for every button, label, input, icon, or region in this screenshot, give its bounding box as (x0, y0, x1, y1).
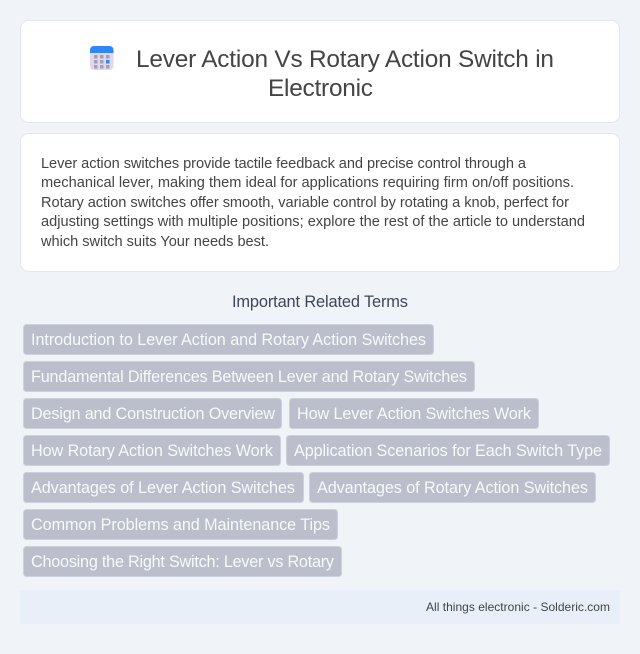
tag: advantages of rotary: Advantages of Rotary Action Switches (317, 479, 588, 497)
tag: application scenarios (286, 436, 610, 466)
tag: how lever switches work (290, 398, 538, 428)
tag: fundamental differences (24, 362, 474, 392)
tag: choosing the right switch: Choosing the Right Switch: Lever vs Rotary (31, 553, 335, 571)
tag: how lever switches work: How Lever Action Switches Work (297, 405, 532, 423)
heading: important related terms: Important Related Terms (232, 293, 408, 311)
summary line 4: adjusting settings with multiple positions; explore the rest of the article to understand (41, 214, 585, 230)
icon: calendar (90, 46, 114, 70)
footer bar (20, 590, 620, 624)
tag: how rotary switches work: How Rotary Action Switches Work (31, 442, 274, 460)
tag: fundamental differences: Fundamental Differences Between Lever and Rotary Switches (31, 368, 467, 386)
tag: choosing the right switch (24, 546, 342, 576)
tag: design and construction: Design and Construction Overview (31, 405, 275, 423)
summary line 5: which switch suits Your needs best. (40, 234, 269, 250)
summary line 1: Lever action switches provide tactile feedback and precise control through a (41, 156, 527, 172)
summary line 2: mechanical lever, making them ideal for applications requiring firm on/off positions. (41, 175, 574, 191)
title line 2: Electronic (268, 75, 373, 102)
tag: advantages of lever: Advantages of Lever Action Switches (31, 479, 295, 497)
tag: application scenarios: Application Scenarios for Each Switch Type (294, 442, 602, 460)
tag: advantages of rotary (310, 472, 596, 502)
title line 1: Lever Action Vs Rotary Action Switch in (136, 46, 554, 73)
panel: title card (20, 20, 620, 122)
tag: common problems (24, 510, 338, 540)
tag: introduction: Introduction to Lever Action and Rotary Action Switches (31, 331, 426, 349)
tag: introduction (24, 324, 434, 354)
summary line 3: Rotary action switches offer smooth, variable control by rotating a knob, perfect for (41, 195, 569, 211)
tag: how rotary switches work (24, 436, 280, 466)
footer text: All things electronic - Solderic.com (426, 600, 610, 614)
tag: design and construction (24, 398, 282, 428)
tag: common problems: Common Problems and Maintenance Tips (31, 516, 330, 534)
tag: advantages of lever (24, 472, 304, 502)
panel: summary card (20, 134, 620, 272)
